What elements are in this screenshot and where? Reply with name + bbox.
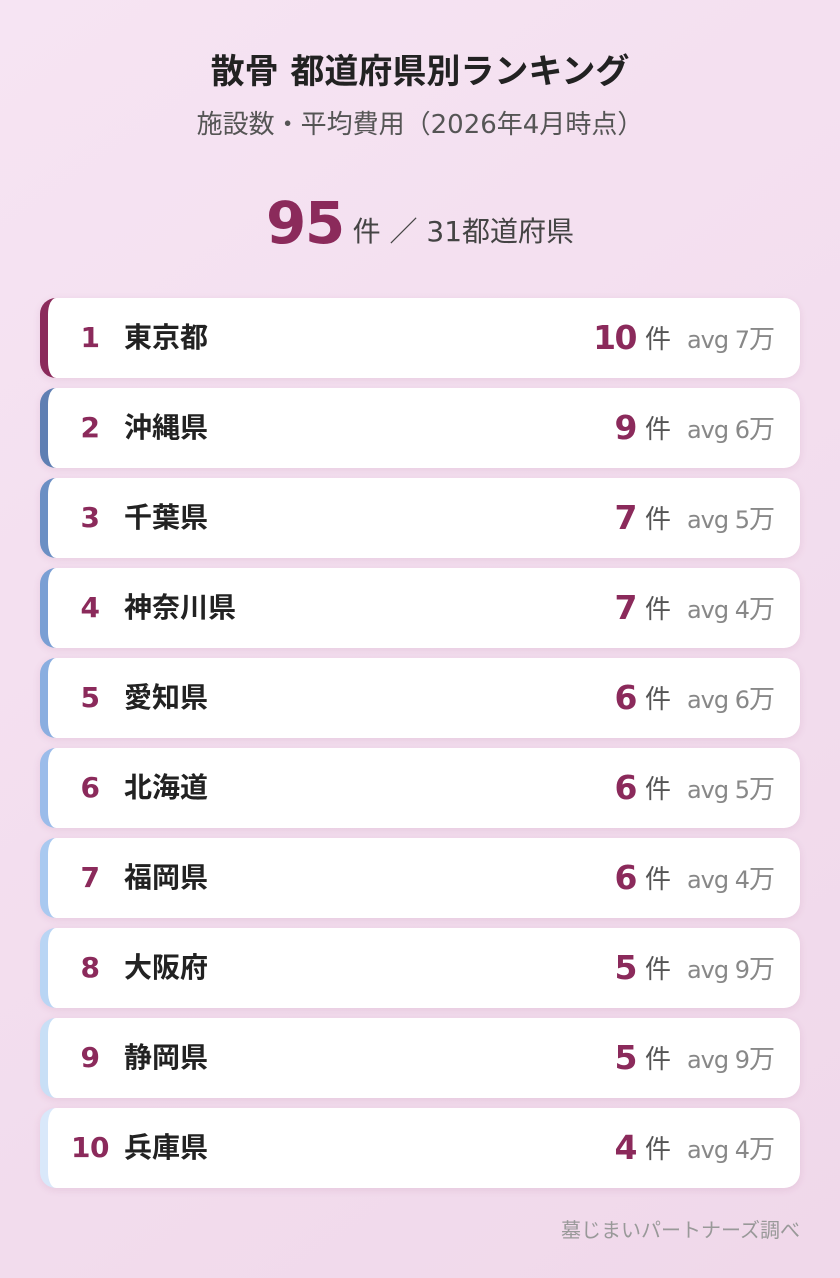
ranking row 4: avg 4万 [687, 595, 775, 625]
ranking row 5: 件 [645, 685, 671, 715]
ranking row 3: 7 [615, 498, 636, 537]
ranking row 9: 5 [615, 1038, 636, 1077]
ranking row 1: 10 [593, 318, 636, 357]
ranking row 7: avg 4万 [687, 865, 775, 895]
ranking row 4 [40, 568, 800, 648]
ranking row 8: avg 9万 [687, 955, 775, 985]
ranking row 8: 8 [80, 951, 99, 984]
ranking row 2: 沖縄県 [124, 411, 208, 444]
ranking row 10 [40, 1108, 800, 1188]
ranking row 1: avg 7万 [687, 325, 775, 355]
ranking row 3: avg 5万 [687, 505, 775, 535]
ranking row 9: 件 [645, 1045, 671, 1075]
ranking row 6 [40, 748, 800, 828]
ranking row 1 [40, 298, 800, 378]
ranking row 6: 北海道 [124, 771, 208, 804]
ranking row 3: 千葉県 [124, 501, 208, 534]
ranking row 3 [40, 478, 800, 558]
ranking row 10: avg 4万 [687, 1135, 775, 1165]
ranking row 8: 5 [615, 948, 636, 987]
ranking row 7: 6 [615, 858, 636, 897]
ranking row 9: avg 9万 [687, 1045, 775, 1075]
ranking row 6: 6 [615, 768, 636, 807]
ranking row 5: 愛知県 [124, 681, 208, 714]
ranking row 5: 5 [80, 681, 99, 714]
ranking row 5: 6 [615, 678, 636, 717]
ranking row 9: 静岡県 [124, 1041, 208, 1074]
ranking row 2: 2 [80, 411, 99, 444]
ranking row 10: 兵庫県 [124, 1131, 208, 1164]
ranking row 10: 10 [71, 1131, 109, 1164]
ranking row 4: 神奈川県 [124, 591, 236, 624]
ranking row 7 [40, 838, 800, 918]
ranking row 5 [40, 658, 800, 738]
ranking row 6: 件 [645, 775, 671, 805]
ranking row 8: 大阪府 [124, 951, 208, 984]
ranking row 2: 9 [615, 408, 636, 447]
ranking row 2: 件 [645, 415, 671, 445]
ranking row 7: 7 [80, 861, 99, 894]
ranking row 5: avg 6万 [687, 685, 775, 715]
ranking row 6: avg 5万 [687, 775, 775, 805]
ranking row 8: 件 [645, 955, 671, 985]
ranking row 1: 件 [645, 325, 671, 355]
ranking row 1: 1 [80, 321, 99, 354]
ranking row 3: 件 [645, 505, 671, 535]
ranking row 4: 7 [615, 588, 636, 627]
ranking row 2 [40, 388, 800, 468]
ranking row 9 [40, 1018, 800, 1098]
ranking row 8 [40, 928, 800, 1008]
ranking row 7: 件 [645, 865, 671, 895]
ranking row 10: 4 [615, 1128, 636, 1167]
ranking row 3: 3 [80, 501, 99, 534]
title: 散骨 都道府県別ランキング [211, 52, 629, 92]
total summary: 95 件 ／ 31都道府県 [266, 189, 574, 257]
ranking row 6: 6 [80, 771, 99, 804]
source footer: 墓じまいパートナーズ調べ [561, 1218, 800, 1242]
ranking row 2: avg 6万 [687, 415, 775, 445]
ranking row 1: 東京都 [124, 321, 208, 354]
ranking row 4: 件 [645, 595, 671, 625]
ranking row 9: 9 [80, 1041, 99, 1074]
subtitle: 施設数・平均費用（2026年4月時点） [197, 110, 643, 140]
ranking row 4: 4 [80, 591, 99, 624]
ranking row 10: 件 [645, 1135, 671, 1165]
ranking row 7: 福岡県 [124, 861, 208, 894]
